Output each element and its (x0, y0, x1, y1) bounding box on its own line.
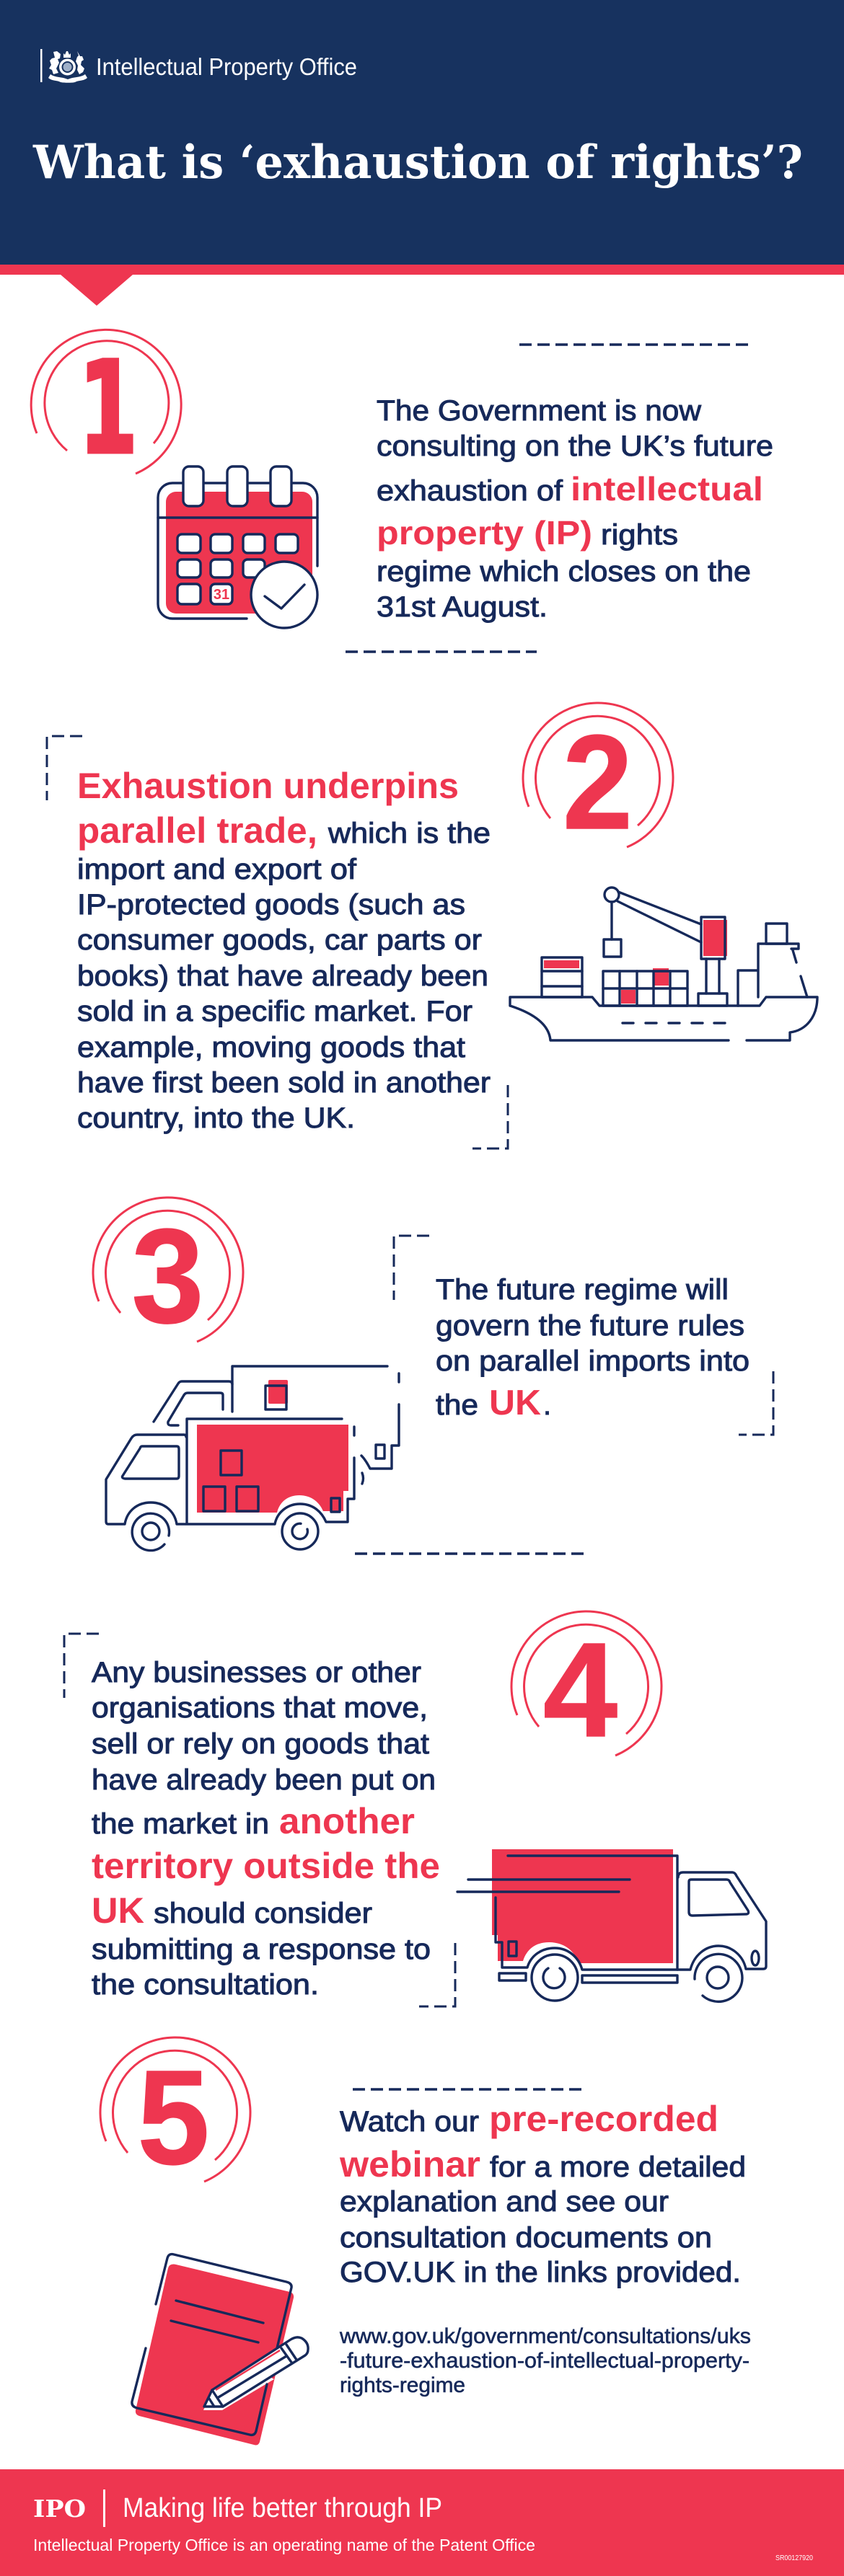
step 3 (93, 1198, 773, 1554)
header banner (0, 0, 844, 306)
icon: royal coat of arms (48, 51, 87, 83)
text block 2: import and export of (77, 854, 357, 885)
number 4 badge: 4 (543, 1616, 617, 1765)
text block 3 (436, 1274, 750, 1422)
text block 4: should consider (154, 1898, 372, 1929)
text block 1: 31st August. (377, 591, 548, 623)
text block 2: sold in a specific market. For (77, 996, 472, 1027)
link text: www.gov.uk/government/consultations/uks (339, 2324, 751, 2348)
text block 2: which is the (328, 818, 491, 849)
footer banner (0, 2469, 844, 2576)
icon: calendar with check: 31 (214, 587, 229, 603)
text block 5: explanation and see our (340, 2186, 669, 2218)
text block 1: property (IP) (377, 514, 592, 552)
logo: royal arms and office name: Intellectual Property Office (96, 53, 357, 80)
text block 4: another (279, 1801, 415, 1841)
number 1 badge (31, 329, 181, 482)
text block 2: IP-protected goods (such as (77, 889, 465, 921)
text block 5: Watch our (340, 2106, 479, 2138)
text block 2: have first been sold in another (77, 1067, 491, 1099)
text block 1: consulting on the UK’s future (377, 430, 773, 462)
text block 1: exhaustion of (377, 475, 563, 507)
text block 2: Exhaustion underpins (77, 766, 459, 806)
title: What is ‘exhaustion of rights’? (32, 136, 803, 190)
link text (339, 2324, 751, 2397)
text block 3: the (436, 1389, 478, 1421)
text block 3: govern the future rules (436, 1310, 744, 1342)
text block 1: rights (601, 519, 678, 551)
text block 4 (92, 1657, 440, 2001)
text block 2: parallel trade, (77, 810, 317, 851)
text block 4: have already been put on (92, 1764, 436, 1796)
number 1 badge: 1 (79, 335, 138, 482)
text block 4: organisations that move, (92, 1692, 428, 1724)
text block 4: the consultation. (92, 1969, 319, 2001)
text block 4: UK (92, 1890, 144, 1931)
text block 1 (377, 395, 773, 623)
icon: delivery trucks (106, 1366, 399, 1551)
step 5 (100, 2037, 751, 2446)
text block 3: . (543, 1389, 551, 1421)
number 5 badge (100, 2037, 250, 2192)
icon: moving truck (457, 1849, 766, 2001)
text block 4: submitting a response to (92, 1934, 431, 1965)
strapline: Making life better through IP (123, 2493, 442, 2523)
icon: notebook and pencil (132, 2254, 308, 2446)
number 2 badge: 2 (563, 708, 633, 857)
operating name note: Intellectual Property Office is an operating name of the Patent Office (33, 2536, 535, 2554)
text block 1: intellectual (571, 470, 763, 508)
text block 4: the market in (92, 1808, 269, 1840)
text block 5 (339, 2099, 746, 2288)
icon: calendar with check (158, 466, 317, 628)
text block 4: Any businesses or other (92, 1657, 421, 1688)
number 4 badge (511, 1611, 661, 1765)
logo: royal arms and office name (40, 49, 357, 83)
text block 4: sell or rely on goods that (92, 1728, 429, 1760)
text block 5: pre-recorded (489, 2099, 718, 2139)
number 3 badge: 3 (131, 1202, 203, 1351)
text block 1: The Government is now (377, 395, 701, 427)
text block 3: on parallel imports into (436, 1345, 750, 1377)
link text: -future-exhaustion-of-intellectual-property- (340, 2349, 750, 2373)
text block 2 (77, 766, 491, 1134)
text block 5: webinar (339, 2144, 480, 2185)
text block 3: UK (489, 1384, 541, 1422)
number 3 badge (93, 1198, 243, 1351)
number 2 badge (523, 703, 673, 857)
text block 5: for a more detailed (490, 2151, 746, 2183)
text block 2: country, into the UK. (77, 1102, 355, 1134)
text block 1: regime which closes on the (377, 556, 751, 588)
text block 5: consultation documents on (340, 2222, 712, 2254)
step 1 (31, 329, 773, 652)
text block 2: example, moving goods that (77, 1032, 465, 1063)
step 4 (64, 1611, 766, 2006)
IPO wordmark: IPO (33, 2495, 86, 2523)
reference code: SR00127920 (775, 2554, 813, 2562)
text block 2: books) that have already been (77, 960, 488, 992)
text block 2: consumer goods, car parts or (77, 924, 482, 956)
text block 4: territory outside the (92, 1846, 440, 1886)
text block 3: The future regime will (436, 1274, 729, 1306)
icon: container ship (510, 888, 817, 1040)
number 5 badge: 5 (137, 2043, 209, 2192)
step 2 (47, 703, 817, 1148)
link text: rights-regime (340, 2373, 465, 2397)
text block 5: GOV.UK in the links provided. (340, 2257, 741, 2288)
